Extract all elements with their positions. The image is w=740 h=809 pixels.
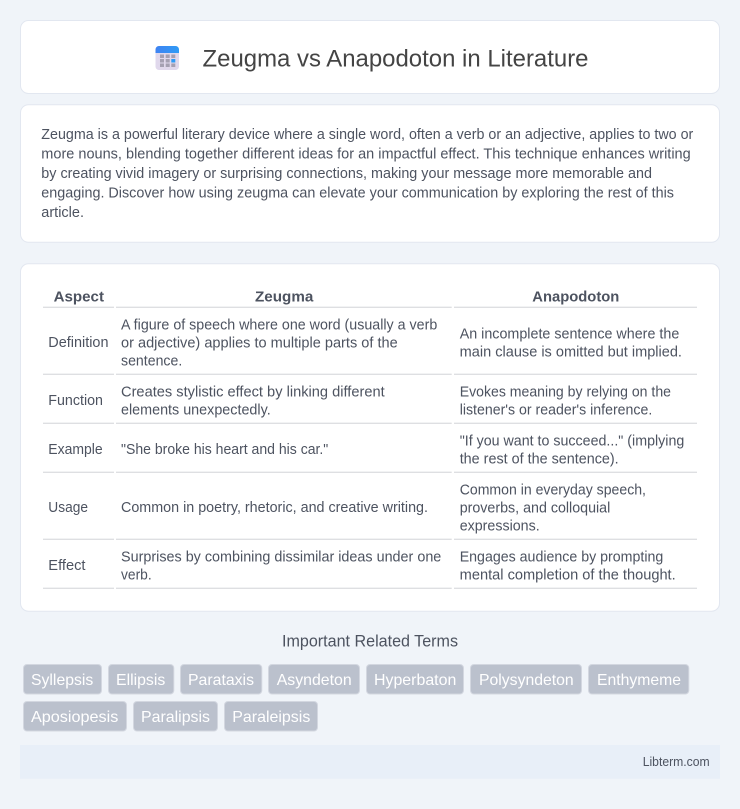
table row: example: "She broke his heart and his car." [121,442,328,458]
table row: example: the rest of the sentence). [460,451,619,467]
footer [20,745,720,779]
tag: Syllepsis [24,664,102,694]
table row: function: Evokes meaning by relying on the [460,384,671,400]
tag: Enthymeme [588,664,689,694]
table row: effect: Engages audience by prompting [460,549,663,565]
table row: definition: Definition [48,335,108,351]
table header row: Aspect [54,289,104,306]
table row: example [48,433,684,467]
table row: definition: main clause is omitted but implied. [460,344,682,360]
table row: effect: Surprises by combining dissimilar ideas under one [121,549,441,565]
tag: Aposiopesis: Aposiopesis [31,709,118,726]
text block: introduction paragraph: by creating vivid imagery or surprising connections, making your message more memorable and [41,166,652,182]
table row: usage: Usage [48,500,88,516]
table row: effect: Effect [48,558,86,574]
tag: Aposiopesis [24,702,126,731]
tag: Paraleipsis [224,702,318,731]
table header row: Zeugma [255,289,314,306]
table header row: Anapodoton [532,289,619,306]
table row: function: listener's or reader's inference. [460,402,652,418]
tag: Polysyndeton [470,664,582,694]
tag: Asyndeton: Asyndeton [277,672,352,689]
table row: effect: mental completion of the thought. [460,567,676,583]
table row: usage: Common in everyday speech, [460,482,646,498]
text block: introduction paragraph: engaging. Discover how using zeugma can elevate your communication by exploring the rest of this [41,186,674,202]
tag: Parataxis [180,664,262,694]
tag: Hyperbaton: Hyperbaton [374,672,456,689]
tag: Paralipsis [134,702,218,731]
table row: function: elements unexpectedly. [121,402,271,418]
table row: effect: verb. [121,567,152,583]
table row: usage: expressions. [460,518,540,534]
text block: introduction paragraph: Zeugma is a powerful literary device where a single word, often a verb or an adjective, applies to two or [41,127,693,143]
text block: introduction paragraph: more nouns, blending together different ideas for an impactful effect. This technique enhances writing [41,147,691,163]
tag: Hyperbaton [366,664,464,694]
tag: Paraleipsis: Paraleipsis [232,709,310,726]
tag: Parataxis: Parataxis [188,672,254,689]
panel: comparison table [20,264,720,611]
table row: function: Function [48,393,103,409]
table row: effect [48,549,676,583]
table row: example: "If you want to succeed..." (implying [460,433,684,449]
table row: definition: A figure of speech where one word (usually a verb [121,317,437,333]
title: Zeugma vs Anapodoton in Literature [202,46,588,73]
footer credit: Libterm.com [643,754,710,769]
table row: function: Creates stylistic effect by linking different [121,384,385,400]
tag: Paralipsis: Paralipsis [141,709,210,726]
heading: important related terms: Important Related Terms [282,633,458,651]
tag: Ellipsis: Ellipsis [116,672,165,689]
text block: introduction paragraph: article. [41,205,84,221]
tag: Ellipsis [108,664,174,694]
table row: usage: Common in poetry, rhetoric, and creative writing. [121,500,428,516]
table row: usage: proverbs, and colloquial [460,500,610,516]
tag: Syllepsis: Syllepsis [31,672,93,689]
table row: usage [48,482,646,534]
tag: Asyndeton [268,664,360,694]
table row: function [48,384,671,418]
text block: introduction paragraph [41,127,693,221]
tag: Polysyndeton: Polysyndeton [479,672,574,689]
tag: Enthymeme: Enthymeme [597,672,681,689]
table header row [54,289,619,306]
icon: calendar [156,46,179,70]
panel: related term tags [24,664,689,731]
table row: example: Example [48,442,103,458]
panel: introduction [20,105,720,242]
table row: definition: sentence. [121,353,182,369]
table row: definition [48,317,682,369]
table row: definition: or adjective) applies to multiple parts of the [121,335,398,351]
panel: title card [20,20,720,94]
table row: definition: An incomplete sentence where the [460,326,679,342]
